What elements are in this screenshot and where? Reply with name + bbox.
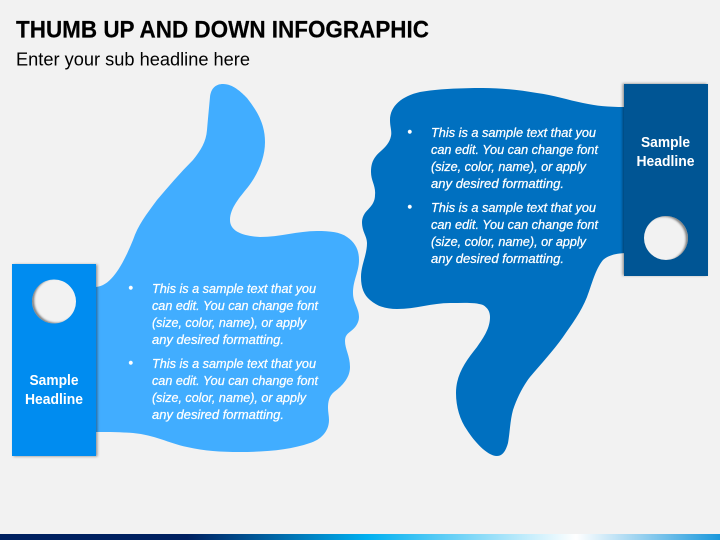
text block: thumb up bullets: any desired formatting. [152,407,284,422]
tag: thumb up cuff [12,264,96,456]
text block: thumb down bullets: This is a sample text that you [431,200,596,215]
text block: thumb up bullets: (size, color, name), or apply [152,315,308,330]
text block: thumb up bullets [128,280,318,422]
text block: thumb up bullets: This is a sample text that you [152,356,316,371]
icon: cuff hole [644,216,688,260]
text block: thumb down bullets: • [408,124,412,139]
text block: thumb down bullets: (size, color, name), or apply [431,159,588,174]
subtitle: Enter your sub headline here [16,48,250,70]
text block: thumb down bullets: can edit. You can change font [431,217,598,232]
text block: thumb up bullets: • [128,355,134,370]
text block: thumb down bullets: • [408,199,412,214]
heading: thumb down cuff: Headline [636,154,694,170]
icon: cuff hole [32,280,76,324]
heading: thumb down cuff: Sample [641,135,690,151]
heading: thumb up cuff: Sample [30,373,78,389]
tag: thumb down cuff [624,84,708,276]
text block: thumb down bullets: (size, color, name), or apply [431,234,588,249]
icon: thumb down hand [361,88,630,456]
text block: thumb up bullets: • [128,280,134,295]
text block: thumb up bullets: any desired formatting. [152,332,284,347]
text block: thumb up bullets: This is a sample text that you [152,281,316,296]
text block: thumb up bullets: can edit. You can change font [152,373,318,388]
icon: thumb up hand [90,84,359,452]
footer gradient bar [0,534,720,540]
text block: thumb down bullets: This is a sample text that you [431,125,596,140]
heading: thumb up cuff: Headline [25,392,83,408]
thumb down panel [361,84,708,456]
text block: thumb down bullets: any desired formatting. [431,251,564,266]
text block: thumb down bullets: any desired formatting. [431,176,564,191]
text block: thumb up bullets: can edit. You can change font [152,298,318,313]
text block: thumb down bullets [408,124,598,266]
text block: thumb down bullets: can edit. You can change font [431,142,598,157]
text block: thumb up bullets: (size, color, name), or apply [152,390,308,405]
thumb up panel [12,84,359,456]
title: THUMB UP AND DOWN INFOGRAPHIC [16,16,429,44]
